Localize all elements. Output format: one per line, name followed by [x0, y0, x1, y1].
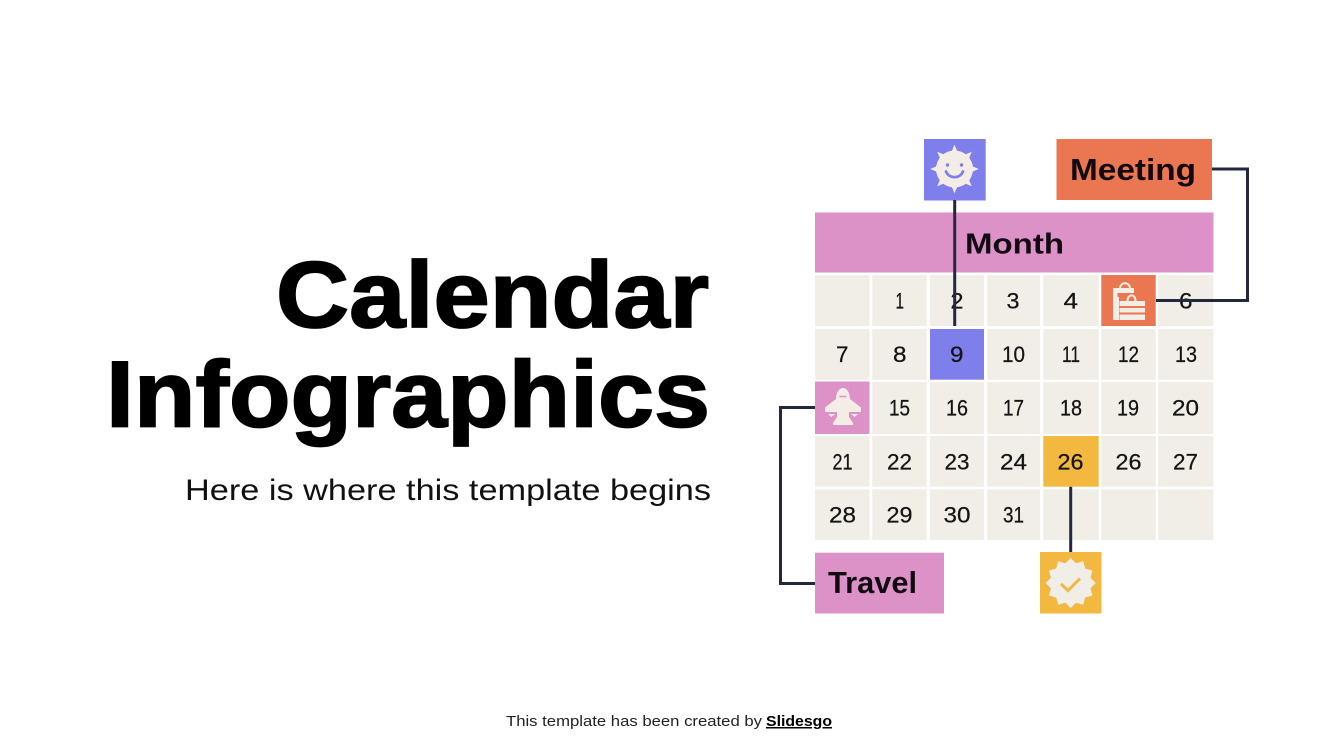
connector: sun to day 9 [953, 200, 956, 326]
week row 2: 13 [1175, 342, 1197, 367]
title: Infographics [106, 342, 710, 446]
calendar [815, 212, 1214, 540]
label: Travel [815, 553, 944, 614]
title: Calendar [276, 242, 709, 347]
connector: airplane to Travel [780, 408, 815, 584]
label: Meeting [1056, 139, 1212, 200]
label: Meeting: Meeting [1070, 152, 1196, 187]
footer credit: This template has been created by [506, 713, 763, 730]
title [106, 242, 710, 446]
week row 2 [815, 329, 1213, 380]
month header: Month [965, 228, 1064, 260]
week row 5: 30 [944, 502, 970, 528]
week row 4: 21 [832, 450, 852, 474]
label: Travel: Travel [828, 565, 917, 600]
week row 4: 22 [887, 450, 912, 474]
week row 4: 23 [944, 450, 970, 474]
week row 2: 12 [1118, 342, 1139, 367]
week row 1: 4 [1064, 288, 1078, 314]
week row 2: 11 [1062, 342, 1080, 367]
week row 5: 31 [1003, 502, 1024, 528]
week row 4: 26 [1116, 450, 1142, 474]
week row 5: 28 [829, 502, 856, 528]
week row 4: 27 [1173, 450, 1198, 474]
week row 1: 2 [950, 288, 964, 314]
week row 5: 29 [886, 502, 912, 528]
week row 2: 7 [836, 342, 848, 367]
connector: Meeting to day 5 [1156, 169, 1248, 300]
icon: meeting briefcase [1101, 275, 1156, 326]
week row 1 [815, 275, 1213, 326]
week row 3: 20 [1172, 396, 1199, 420]
week row 5 [815, 489, 1213, 540]
week row 1: 6 [1179, 288, 1192, 314]
footer credit: Slidesgo [766, 713, 832, 730]
week row 4: 24 [1000, 450, 1027, 474]
week row 2: 10 [1002, 342, 1025, 367]
icon: smiling sun [924, 139, 986, 200]
week row 3: 18 [1060, 396, 1082, 420]
month header [815, 212, 1214, 272]
connector: day 26 to badge [1069, 487, 1072, 552]
week row 1: 3 [1006, 288, 1020, 314]
week row 3: 15 [889, 396, 910, 420]
icon: airplane [825, 388, 861, 425]
week row 3 [815, 382, 1213, 434]
week row 2: 8 [893, 342, 906, 367]
week row 3: 17 [1003, 396, 1024, 420]
icon: check badge [1040, 552, 1102, 614]
week row 3: 19 [1117, 396, 1139, 420]
week row 2: 9 [950, 342, 964, 367]
week row 4 [815, 436, 1213, 487]
subtitle: Here is where this template begins [185, 474, 711, 507]
week row 4: 26 [1058, 450, 1084, 474]
week row 1: 1 [896, 288, 904, 314]
week row 3: 16 [946, 396, 968, 420]
